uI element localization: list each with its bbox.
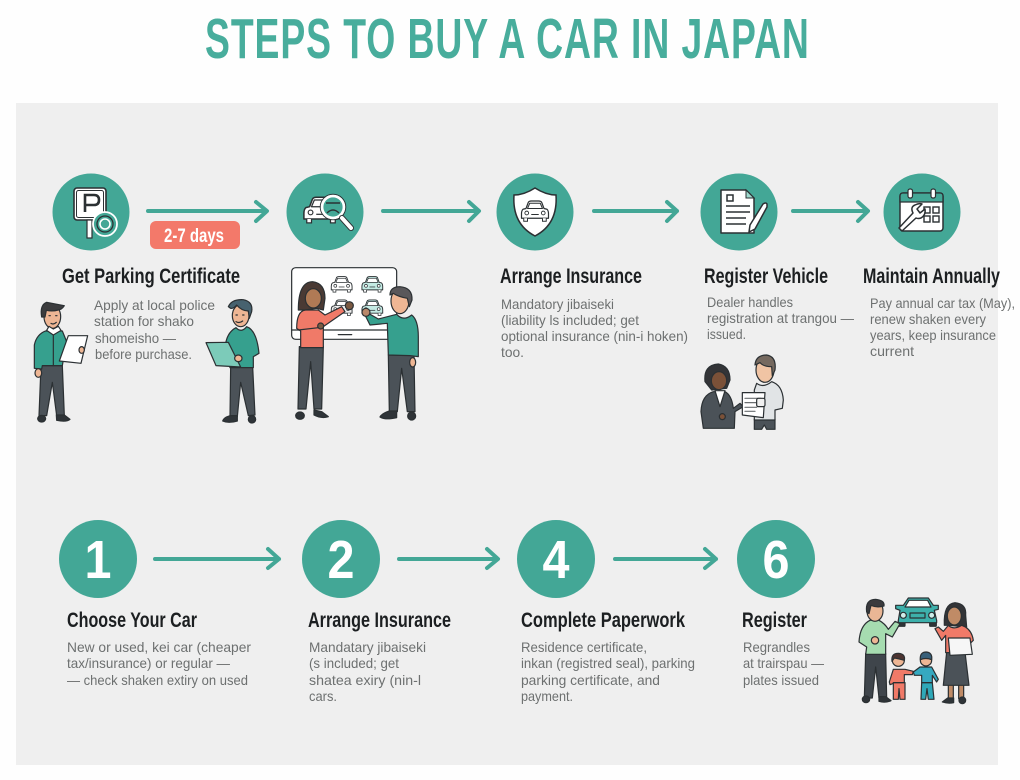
text: maintain annually description — [870, 295, 1015, 359]
step icon: register document — [700, 174, 778, 250]
text: register vehicle description: Dealer handles — [707, 294, 793, 310]
number badge 4 — [517, 520, 595, 598]
text: insurance description: (liability ls included; get — [501, 312, 639, 328]
illustration: dealer handing over document — [701, 355, 783, 429]
duration pill — [150, 221, 240, 249]
text: register description: plates issued — [743, 672, 819, 688]
text: maintain annually description: years, keep insurance — [870, 327, 996, 343]
heading: get parking certificate: Get Parking Certificate — [62, 265, 240, 288]
text: arrange insurance, lower row description: cars. — [309, 688, 337, 704]
text: parking certificate description: Apply at local police — [94, 297, 215, 313]
text: complete paperwork description: parking certificate, and — [521, 672, 660, 688]
text: register description — [743, 639, 824, 688]
step icon: car search — [286, 174, 364, 250]
arrow: step 2 to step 3 — [383, 202, 479, 221]
text: insurance description: optional insurance (nin-i hoken) — [501, 328, 688, 344]
text: choose your car description: New or used, kei car (cheaper — [67, 639, 251, 655]
text: insurance description: Mandatory jibaiseki — [501, 296, 614, 312]
text: choose your car description — [67, 639, 251, 688]
text: choose your car description: tax/insurance) or regular — — [67, 655, 230, 671]
text: complete paperwork description: payment. — [521, 688, 573, 704]
illustration: man with tablet — [206, 300, 259, 423]
text: complete paperwork description — [521, 639, 695, 704]
illustration: couple choosing cars on screen — [292, 268, 418, 420]
number badge 4: 4 — [542, 530, 570, 590]
duration pill: 2-7 days — [164, 226, 224, 247]
text: arrange insurance, lower row description: shatea exiry (nin-l — [309, 672, 421, 688]
text: insurance description: too. — [501, 344, 524, 360]
number badge 1: 1 — [84, 530, 112, 590]
heading: register: Register — [742, 609, 807, 632]
illustration: man reading paper — [34, 302, 88, 422]
text: maintain annually description: renew shaken every — [870, 311, 986, 327]
heading: complete paperwork: Complete Paperwork — [521, 609, 685, 632]
number badge 2: 2 — [328, 530, 354, 590]
arrow: step 4 to step 5 — [793, 202, 868, 221]
number badge 2 — [302, 520, 380, 598]
step icon: maintain calendar and wrench — [884, 174, 960, 250]
step icon: insurance shield — [496, 174, 574, 250]
text: register description: at trairspau — — [743, 655, 824, 671]
arrow: step 1 to step 2 — [148, 202, 267, 221]
text: complete paperwork description: Residence certificate, — [521, 639, 647, 655]
illustration: family holding car — [859, 598, 973, 704]
arrow: step 3 to step 4 — [594, 202, 677, 221]
text: maintain annually description: current — [870, 343, 914, 359]
number badge 6: 6 — [762, 530, 790, 590]
text: insurance description — [501, 296, 688, 360]
text: register vehicle description: issued. — [707, 326, 746, 342]
heading: arrange insurance: Arrange Insurance — [500, 265, 642, 288]
heading: choose your car: Choose Your Car — [67, 609, 197, 632]
heading: register vehicle: Register Vehicle — [704, 265, 828, 288]
text: choose your car description: — check shaken extiry on used — [67, 672, 248, 688]
arrow: 1 to 2 — [155, 549, 279, 568]
text: arrange insurance, lower row description — [309, 639, 426, 704]
text: register description: Regrandles — [743, 639, 810, 655]
title: STEPS TO BUY A CAR IN JAPAN — [205, 7, 809, 71]
number badge 1 — [59, 520, 137, 598]
arrow: 4 to 6 — [615, 549, 716, 568]
step icon: parking certificate — [52, 174, 130, 250]
text: complete paperwork description: inkan (registred seal), parking — [521, 655, 695, 671]
text: parking certificate description: shomeisho — — [95, 330, 176, 346]
text: parking certificate description: station for shako — [94, 313, 194, 329]
text: arrange insurance, lower row description: (s included; get — [309, 655, 399, 671]
arrow: 2 to 4 — [399, 549, 498, 568]
heading: arrange insurance, lower row: Arrange Insurance — [308, 609, 451, 632]
number badge 6 — [737, 520, 815, 598]
text: register vehicle description: registration at trangou — — [707, 310, 854, 326]
text: register vehicle description — [707, 294, 854, 342]
text: parking certificate description: before purchase. — [95, 346, 192, 362]
text: parking certificate description — [94, 297, 215, 362]
text: arrange insurance, lower row description: Mandatary jibaiseki — [309, 639, 426, 655]
